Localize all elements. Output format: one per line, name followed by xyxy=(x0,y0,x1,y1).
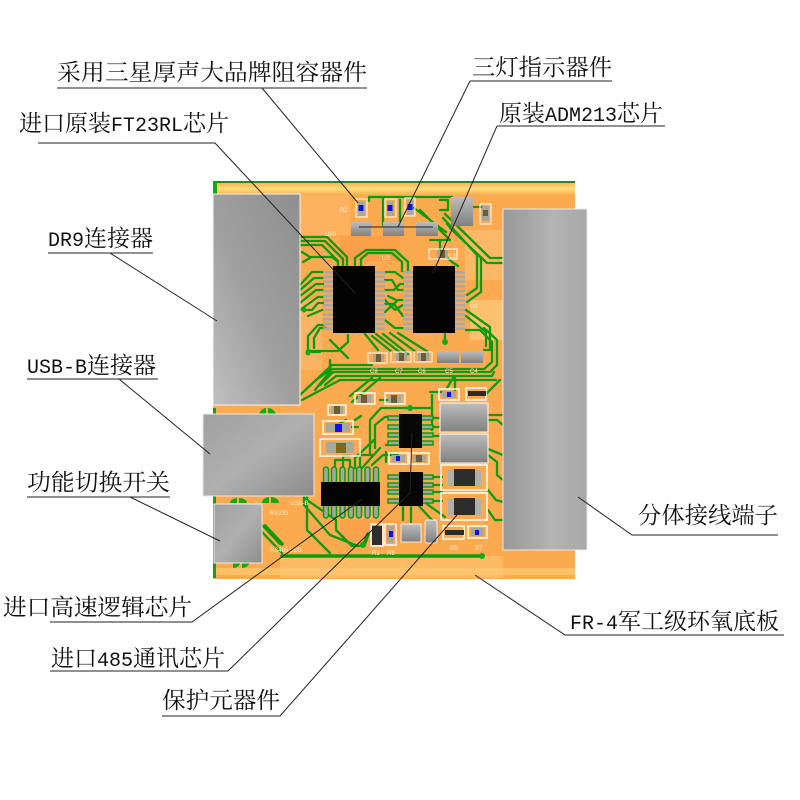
label: protection: 保护元器件 xyxy=(162,682,280,715)
label: FR-4: FR-4军工级环氧底板 xyxy=(570,603,779,636)
label: 485 chip: 进口485通讯芯片 xyxy=(51,640,225,673)
small passives middle xyxy=(320,388,487,546)
panel: circuit board xyxy=(213,181,575,579)
silkscreen labels: R8 xyxy=(387,551,395,557)
split terminal xyxy=(503,209,587,550)
leader: 485 xyxy=(50,433,412,671)
label: ADM213: 原装ADM213芯片 xyxy=(499,95,663,128)
leader: FR-4 xyxy=(475,575,784,635)
silkscreen labels: C4 xyxy=(470,369,478,375)
silkscreen labels: R7 xyxy=(475,546,483,552)
leader: ADM213 xyxy=(433,126,665,273)
silkscreen labels: R9 xyxy=(450,546,458,552)
485 chip lower xyxy=(388,472,433,506)
silkscreen labels: RS485 LED xyxy=(270,548,302,554)
leader: USB-B xyxy=(27,379,210,454)
silkscreen labels: RS232 xyxy=(270,511,289,517)
silkscreen labels xyxy=(270,208,483,557)
label: USB-B: USB-B连接器 xyxy=(27,347,156,380)
wide logic chip xyxy=(321,467,380,518)
label: terminal: 分体接线端子 xyxy=(638,497,778,530)
silkscreen labels: C6 xyxy=(418,369,426,375)
label: FT23RL: 进口原装FT23RL芯片 xyxy=(19,105,229,138)
silkscreen labels: C5 xyxy=(445,369,453,375)
leader lines and underlines xyxy=(27,81,784,716)
leader: logic chip xyxy=(50,499,362,622)
USB-B connector xyxy=(203,414,314,496)
gray capacitors C5 C4 xyxy=(437,351,483,363)
bottom gray parts xyxy=(401,520,437,543)
silkscreen labels: C7 xyxy=(395,369,403,375)
silkscreen labels: U20 xyxy=(325,232,337,238)
three LEDs xyxy=(356,198,415,217)
FT23RL chip xyxy=(323,266,385,333)
label: logic chip: 进口高速逻辑芯片 xyxy=(3,589,192,622)
label: DR9: DR9连接器 xyxy=(48,220,153,253)
leader: three LEDs xyxy=(359,81,612,227)
leader: DR9 xyxy=(48,253,217,321)
protection gray parts xyxy=(440,403,488,463)
leader: FT23RL xyxy=(38,143,355,293)
ADM213 chip xyxy=(403,266,465,333)
top gray components xyxy=(351,197,473,236)
small capacitors top and mid row xyxy=(368,204,491,363)
label: function switch: 功能切换开关 xyxy=(27,464,170,497)
leader: protection xyxy=(162,515,457,716)
leader: terminal xyxy=(578,497,778,535)
leader: function switch xyxy=(27,497,220,541)
485 chip upper xyxy=(388,414,433,448)
label: three LEDs: 三灯指示器件 xyxy=(472,49,612,82)
silkscreen labels: C3 xyxy=(448,254,456,260)
label: resistors: 采用三星厚声大品牌阻容器件 xyxy=(57,54,367,87)
traces xyxy=(262,197,503,553)
green pads xyxy=(213,181,485,568)
protection dark ICs xyxy=(441,465,487,520)
silkscreen labels: C8 xyxy=(370,369,378,375)
function switch xyxy=(214,504,262,563)
leader: resistors xyxy=(57,88,367,203)
DR9 connector xyxy=(213,194,300,405)
silkscreen labels: U3 xyxy=(382,256,390,262)
silkscreen labels: U8 xyxy=(470,304,478,310)
silkscreen labels: USB-B xyxy=(290,501,308,507)
silkscreen labels: R1 xyxy=(372,551,380,557)
silkscreen labels: R2 xyxy=(340,208,348,214)
